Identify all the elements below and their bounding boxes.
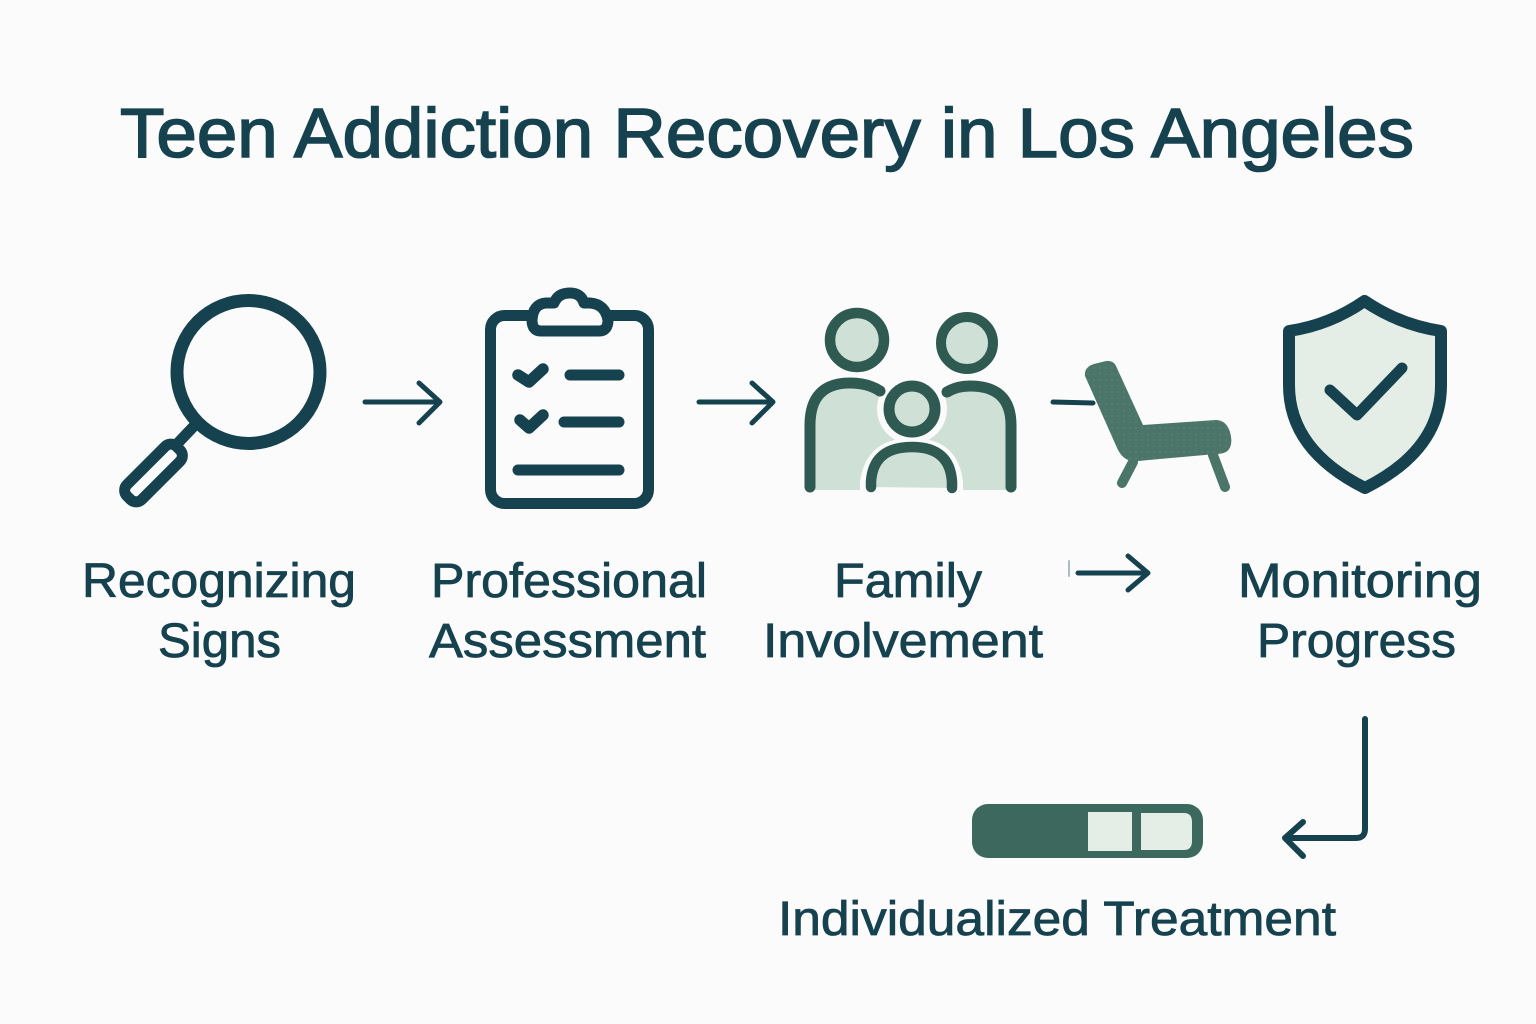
icon: shield — [1289, 301, 1441, 488]
label: Monitoring Progress: Progress — [1257, 615, 1456, 668]
label: Family Involvement: Involvement — [763, 615, 1043, 668]
label: Monitoring Progress: Monitoring — [1238, 555, 1482, 608]
icon: magnifying glass — [121, 300, 320, 505]
label: Monitoring Progress — [1238, 555, 1482, 668]
label: Family Involvement — [763, 555, 1043, 668]
arrow 4 — [1285, 719, 1365, 856]
arrow 3 — [1069, 556, 1148, 590]
label: Professional Assessment: Assessment — [429, 615, 706, 668]
label: Professional Assessment: Professional — [431, 555, 707, 608]
label: Recognizing Signs — [82, 555, 356, 668]
label: Family Involvement: Family — [834, 555, 982, 608]
arrow 2 — [699, 383, 773, 423]
label: Recognizing Signs: Signs — [158, 615, 281, 668]
icon: therapy chair — [1085, 361, 1231, 487]
label: Individualized Treatment: Individualized Treatment — [778, 893, 1336, 946]
icon: family — [810, 313, 1011, 492]
label: Recognizing Signs: Recognizing — [82, 555, 356, 608]
title: Teen Addiction Recovery in Los Angeles — [120, 94, 1414, 172]
icon: clipboard — [490, 293, 648, 504]
arrow 1 — [365, 383, 440, 423]
icon: treatment bar — [972, 804, 1203, 858]
label: Professional Assessment — [429, 555, 707, 668]
arrow stub — [1053, 402, 1093, 403]
